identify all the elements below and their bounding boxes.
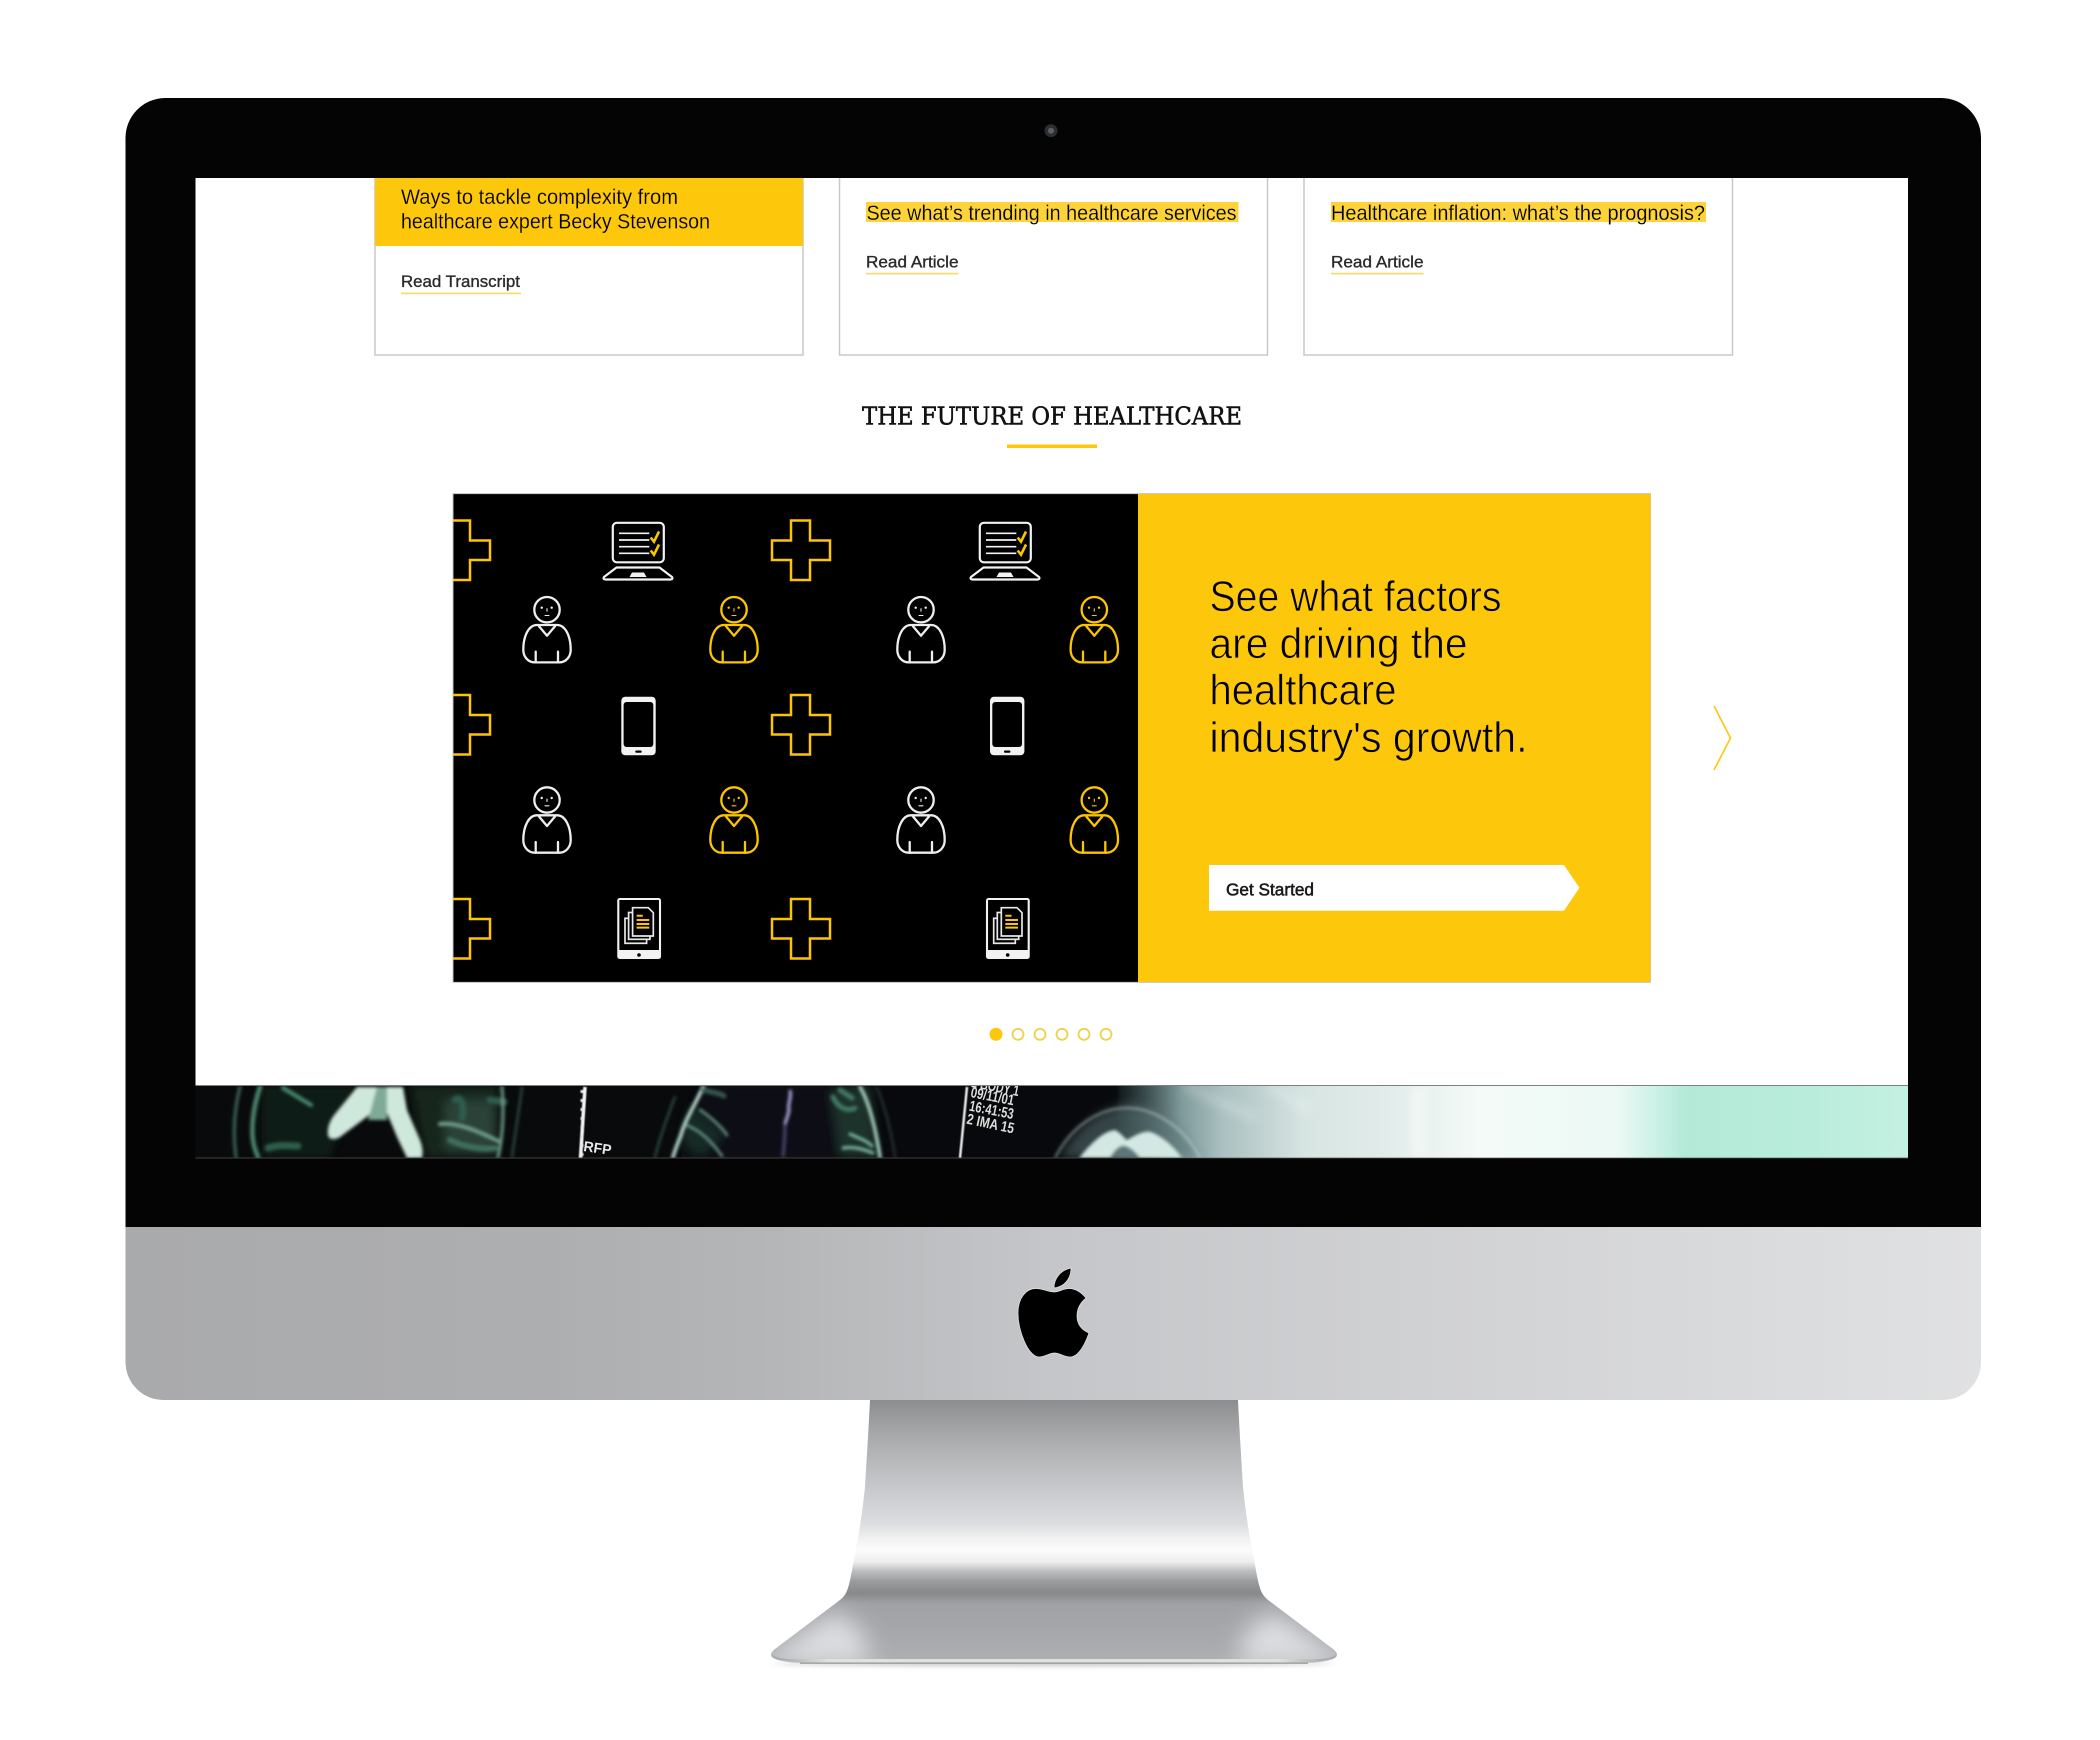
card 3 link: Read Article [1331, 252, 1424, 271]
card 3 link underline [1331, 273, 1424, 274]
iMac mockup infographic [126, 98, 1981, 1668]
scan label time: 16:41:53 [968, 1098, 1015, 1123]
icon: cross row 3 left [453, 694, 492, 756]
panel: card 3 [1304, 178, 1732, 355]
card 1 link underline [401, 293, 521, 294]
icon: phone left [621, 697, 656, 755]
screen [196, 178, 1908, 1159]
card 2 title highlight [866, 202, 1238, 222]
button: get started: Get Started [1226, 879, 1314, 899]
soft tissue haze of the scans [262, 1085, 1200, 1158]
scan label image number: 2 IMA 15 [965, 1111, 1016, 1137]
card 3 title highlight [1331, 202, 1706, 222]
card 2 link: Read Article [866, 252, 958, 271]
icon: person row 2 yellow [710, 597, 758, 662]
icon: person row 2 white right [897, 597, 945, 662]
card 1 title line 1: Ways to tackle complexity from [401, 186, 678, 209]
arrow: carousel next [1714, 706, 1730, 770]
carousel pagination dots [990, 1029, 1112, 1040]
heading underline [1007, 444, 1097, 448]
icon: cross row 5 [772, 899, 830, 958]
apple logo [1018, 1268, 1089, 1357]
card 1 title line 2: healthcare expert Becky Stevenson [401, 210, 710, 234]
card 2 link underline [866, 273, 958, 274]
brain scan ventricles [328, 1087, 377, 1139]
button: get started [1209, 865, 1579, 911]
scan label RFP: RFP [582, 1139, 613, 1159]
icon: cross row 1 left [453, 519, 492, 582]
icon: person row 4 yellow [710, 787, 758, 853]
icon: cross row 3 [772, 695, 830, 754]
icon: laptop left [604, 523, 672, 580]
card 1 link: Read Transcript [401, 272, 520, 291]
card 1 yellow header [375, 178, 803, 246]
silver chin of monitor [126, 1227, 1981, 1400]
icon: person row 4 white [523, 787, 571, 853]
card 3 title: Healthcare inflation: what’s the prognosis? [1331, 202, 1705, 225]
footer brain scan image strip [196, 1086, 1908, 1158]
icon: tablet right [987, 899, 1029, 958]
icon: cross row 5 left [453, 898, 492, 960]
icon: person row 2 white [523, 597, 571, 662]
monitor black bezel [126, 98, 1981, 1227]
hero text line 4: industry's growth. [1210, 714, 1528, 762]
scan label date: 09/11/01 [969, 1084, 1016, 1109]
heading: THE FUTURE OF HEALTHCARE [862, 401, 1242, 430]
icon: person row 2 yellow right [1071, 597, 1118, 662]
hero text line 3: healthcare [1210, 666, 1396, 714]
monitor stand [760, 1400, 1348, 1666]
panel: card 2 [840, 178, 1268, 355]
icon: tablet left [618, 899, 660, 958]
icon: person row 4 yellow right [1071, 787, 1118, 853]
panel: card 1 [375, 178, 803, 355]
icon: cross row 1 [772, 520, 830, 580]
icon: laptop right [971, 523, 1039, 580]
webcam [1044, 124, 1058, 137]
hero text line 1: See what factors [1210, 573, 1502, 621]
card 2 title: See what’s trending in healthcare services [866, 202, 1236, 225]
panel: hero black icon pattern [432, 494, 1650, 982]
panel: hero yellow call to action [1138, 494, 1650, 982]
scan label patient row: 2 BODY 1 [970, 1074, 1021, 1100]
icon: person row 4 white right [897, 787, 945, 853]
hero text line 2: are driving the [1210, 620, 1468, 668]
icon: phone right [990, 697, 1024, 755]
